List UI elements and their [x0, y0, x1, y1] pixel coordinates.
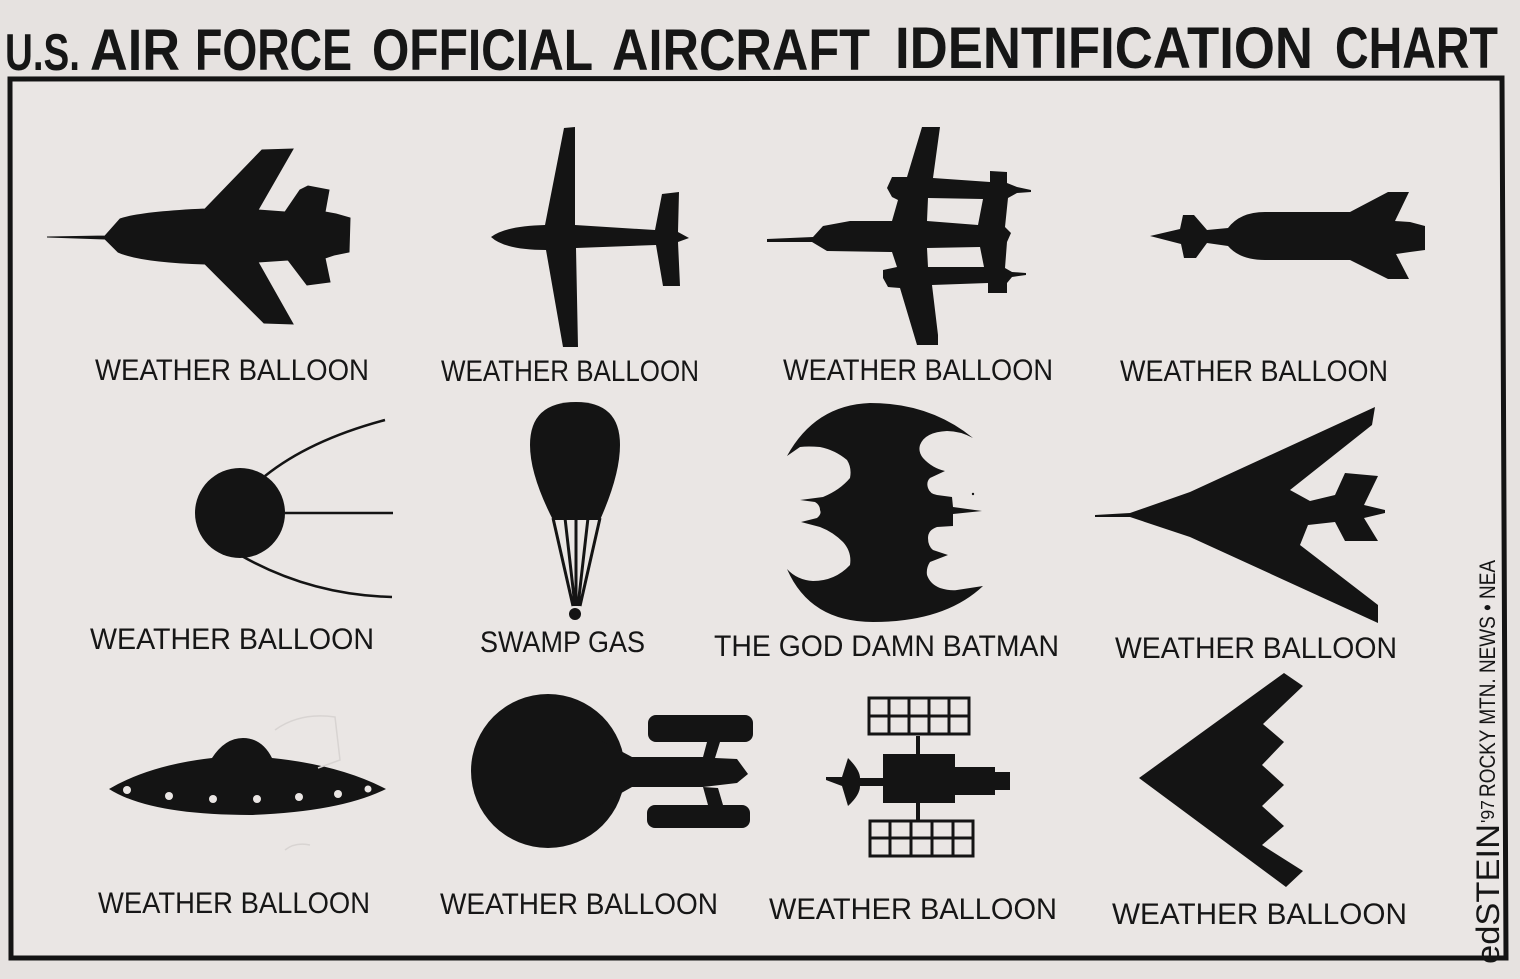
- caption: WEATHER BALLOON: [440, 888, 718, 921]
- caption: THE GOD DAMN BATMAN: [714, 630, 1059, 663]
- title: AIRCRAFT: [612, 18, 870, 83]
- title: AIR: [90, 18, 180, 83]
- title: IDENTIFICATION: [895, 16, 1313, 81]
- caption: WEATHER BALLOON: [1112, 898, 1407, 931]
- icon: straight wing plane: [491, 127, 689, 347]
- icon: jet fighter: [47, 149, 350, 324]
- caption: WEATHER BALLOON: [98, 887, 370, 920]
- icon: rocket plane: [1150, 192, 1425, 279]
- icon: flying wing bomber: [1095, 407, 1385, 623]
- title: [5, 16, 1498, 83]
- caption: WEATHER BALLOON: [1120, 355, 1388, 388]
- title: FORCE: [195, 18, 352, 83]
- caption: WEATHER BALLOON: [1115, 632, 1397, 665]
- icon: stealth bomber: [1139, 673, 1303, 887]
- caption: WEATHER BALLOON: [783, 354, 1053, 387]
- credit: year: '97: [1478, 800, 1498, 823]
- caption: WEATHER BALLOON: [90, 623, 374, 656]
- icon: flying saucer: [109, 716, 386, 850]
- caption: SWAMP GAS: [480, 626, 645, 659]
- icon: starship enterprise: [471, 694, 753, 848]
- credit: publisher: ROCKY MTN. NEWS • NEA: [1475, 560, 1500, 797]
- caption: WEATHER BALLOON: [95, 354, 369, 387]
- icon: hot air balloon: [530, 402, 620, 620]
- title: U.S.: [5, 24, 80, 82]
- icon: sputnik: [195, 420, 393, 597]
- caption: WEATHER BALLOON: [769, 893, 1057, 926]
- artist signature: edSTEIN: [1470, 824, 1506, 964]
- icon: bat symbol: [787, 403, 983, 622]
- title: OFFICIAL: [372, 18, 593, 83]
- icon: twin boom plane: [767, 127, 1031, 345]
- caption: WEATHER BALLOON: [441, 355, 699, 388]
- icon: hubble telescope: [826, 698, 1010, 856]
